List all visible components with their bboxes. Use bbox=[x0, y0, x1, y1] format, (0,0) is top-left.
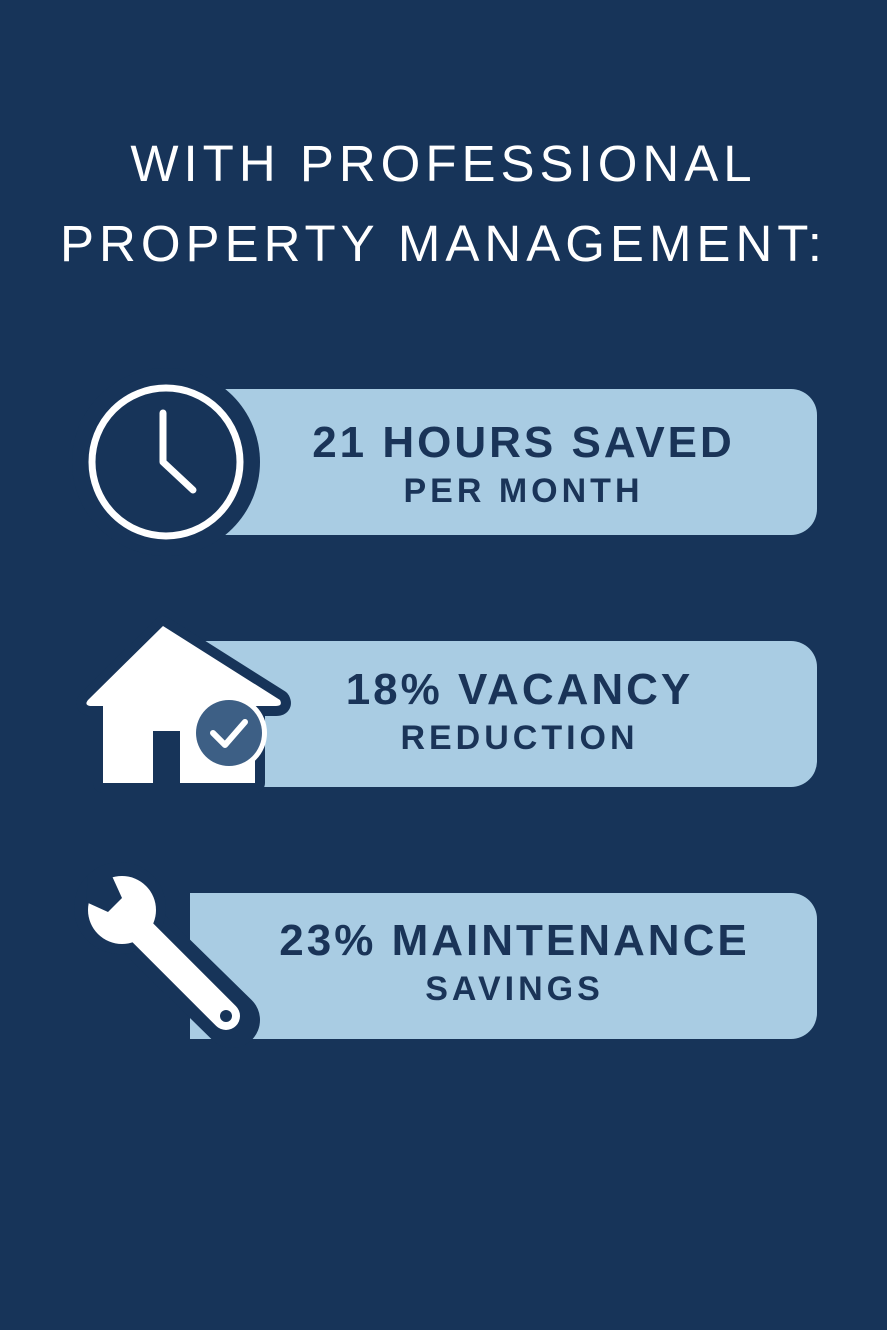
text: vacancy: REDUCTION bbox=[400, 719, 639, 757]
title: PROPERTY MANAGEMENT: bbox=[60, 215, 827, 272]
panel: vacancy bbox=[200, 641, 817, 787]
icon: house with check bbox=[86, 626, 281, 790]
icon: clock bbox=[72, 368, 260, 556]
text: hours: PER MONTH bbox=[404, 472, 644, 510]
panel: hours saved bbox=[200, 389, 817, 535]
title: WITH PROFESSIONAL bbox=[130, 135, 757, 192]
panel: maintenance bbox=[185, 893, 817, 1039]
text: maintenance: SAVINGS bbox=[425, 970, 604, 1008]
text: maintenance: 23% MAINTENANCE bbox=[279, 916, 750, 965]
icon: wrench bbox=[74, 862, 232, 1043]
text: hours: 21 HOURS SAVED bbox=[312, 418, 735, 467]
text: vacancy: 18% VACANCY bbox=[346, 665, 693, 714]
text: maintenance bbox=[279, 916, 750, 1008]
title bbox=[60, 135, 827, 272]
text: vacancy bbox=[346, 665, 693, 757]
text: hours bbox=[312, 418, 735, 510]
